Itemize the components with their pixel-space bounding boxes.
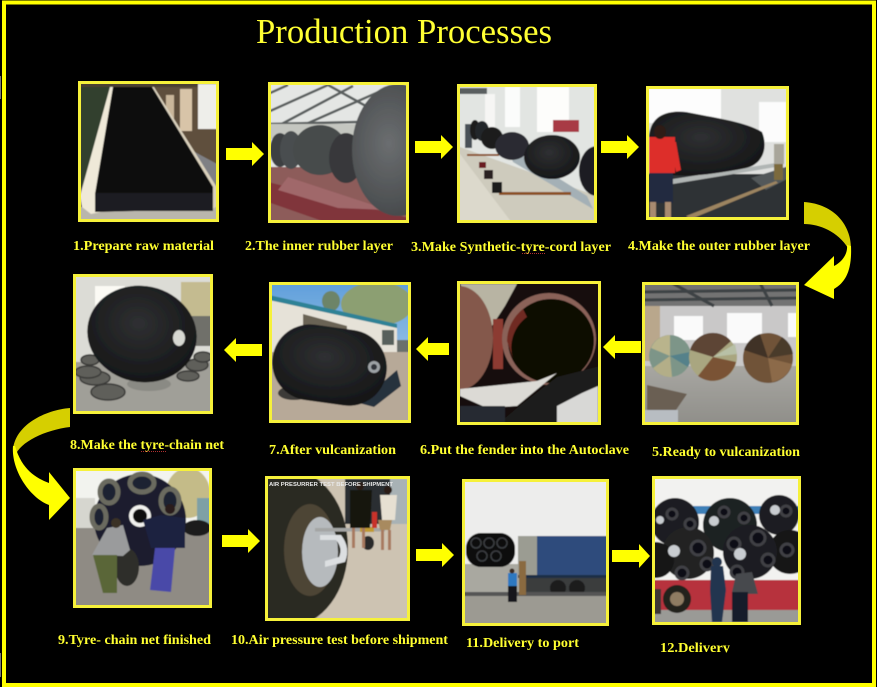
panel: step 1 prepare raw material	[78, 81, 219, 222]
arrow: 3 to 4	[601, 135, 639, 159]
arrow: 11 to 12	[612, 544, 650, 568]
panel: step 3 synthetic tyre cord layer	[457, 84, 615, 223]
label: step 9: 9.Tyre- chain net finished	[58, 632, 212, 647]
label: step 7: 7.After vulcanization	[269, 442, 397, 457]
arrow: 5 to 6	[603, 335, 641, 359]
panel: step 9 net finished	[73, 468, 212, 608]
panel: step 8 tyre-chain net	[73, 274, 213, 414]
label: step 12: 12.Delivery	[660, 640, 730, 655]
edge marks	[0, 76, 1, 677]
title: Production Processes	[256, 12, 552, 51]
arrow: 9 to 10	[222, 529, 260, 553]
label: step 8: 8.Make the tyre-chain net	[70, 437, 225, 452]
spell-check underlines	[141, 254, 546, 452]
label: step 11: 11.Delivery to port	[466, 635, 580, 650]
panel: step 4 outer rubber layer	[646, 86, 789, 222]
label: step 4: 4.Make the outer rubber layer	[628, 238, 810, 253]
curved arrow: 8 to 9	[13, 408, 70, 520]
panel: step 6 autoclave	[425, 281, 601, 425]
label: step 3: 3.Make Synthetic-tyre-cord layer	[411, 239, 611, 254]
panel: step 5 ready to vulcanization	[642, 282, 799, 425]
panel: step 10 air pressure test	[232, 470, 410, 626]
arrow: 7 to 8	[224, 338, 262, 362]
photo caption: AIR PRESURRER TEST BEFORE SHIPMENT	[269, 482, 393, 488]
label: step 6: 6.Put the fender into the Autoclave	[420, 442, 629, 457]
label: step 2: 2.The inner rubber layer	[245, 238, 393, 253]
panel: step 11 delivery to port	[462, 479, 609, 626]
panel: step 2 inner rubber layer	[268, 82, 444, 223]
curved arrow: 4 to 5	[804, 202, 851, 299]
arrow: 1 to 2	[226, 142, 264, 166]
panel: step 7 after vulcanization	[267, 282, 413, 423]
label: step 5: 5.Ready to vulcanization	[652, 444, 800, 459]
arrow: 2 to 3	[415, 135, 453, 159]
label: step 10: 10.Air pressure test before shipment	[231, 632, 449, 647]
label: step 1: 1.Prepare raw material	[73, 238, 214, 253]
panel: step 12 delivery	[638, 476, 812, 625]
arrow: 10 to 11	[416, 543, 454, 567]
arrow: 6 to 7	[416, 337, 449, 361]
